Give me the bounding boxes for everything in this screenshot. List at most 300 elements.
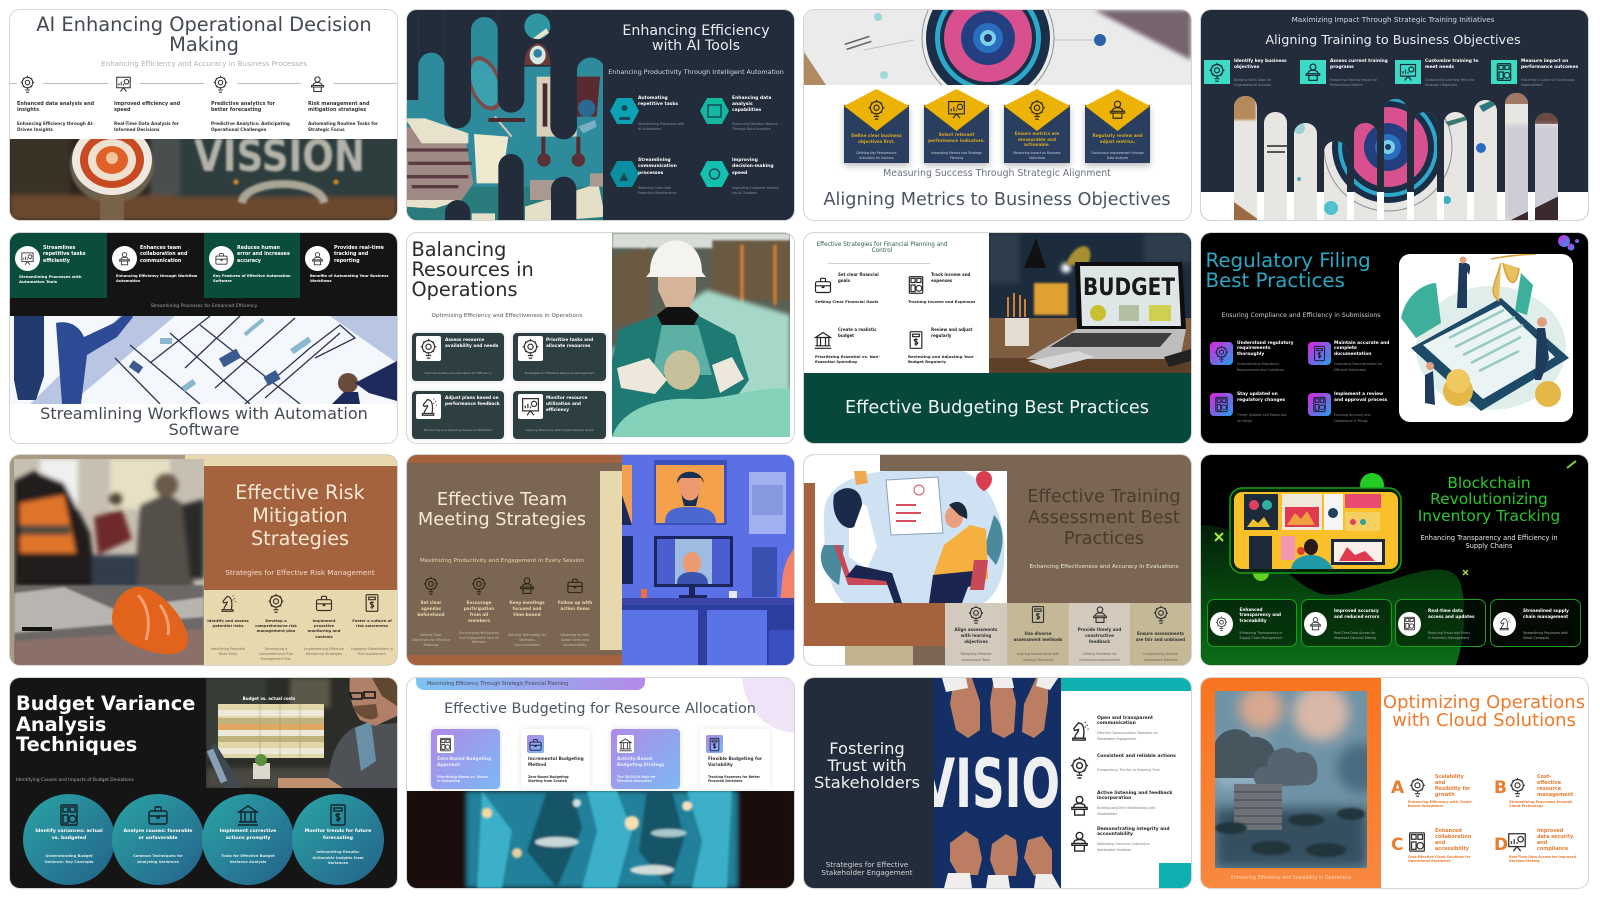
label — [124, 828, 192, 842]
icon: globe with cap — [1151, 605, 1171, 624]
subtitle — [1420, 534, 1558, 550]
icon: circuit brain — [20, 76, 34, 93]
icon: hexagon chess piece — [610, 161, 638, 187]
label: focused and — [513, 606, 541, 611]
note — [459, 631, 499, 644]
icon: team network — [310, 76, 324, 92]
icon: white circle chess — [1493, 612, 1516, 636]
note: on Filings — [1237, 419, 1252, 423]
label: compliance — [1537, 846, 1568, 852]
label: communication — [140, 259, 181, 264]
label: performance feedback — [445, 402, 500, 406]
label — [638, 158, 677, 176]
icon: book — [362, 593, 382, 613]
icon: gear head — [421, 576, 441, 595]
label: Real-time data — [1428, 608, 1463, 613]
note: Utilizing Technology for — [508, 632, 546, 636]
card: performance indicators — [924, 89, 989, 163]
icon: bank tile — [617, 734, 634, 752]
label — [140, 246, 187, 265]
icon: briefcase tile — [527, 734, 544, 752]
title: Best Practices — [1206, 268, 1345, 292]
icon: gold diamond with gear — [844, 89, 909, 131]
label: chain management — [1523, 614, 1568, 619]
label: Identify and assess — [207, 618, 249, 623]
top teal bar — [1061, 678, 1191, 690]
subtitle — [817, 242, 947, 254]
note: Streamlining Processes with — [1523, 630, 1568, 634]
note — [45, 852, 93, 865]
slide: Enhancing Efficiency with AI Tools — [407, 10, 794, 220]
label: Activity-Based — [617, 756, 652, 762]
title — [418, 490, 586, 531]
label — [838, 327, 877, 339]
label — [1015, 131, 1059, 148]
title: Techniques — [16, 733, 137, 756]
label: performance outcomes — [1521, 65, 1578, 70]
note — [1521, 78, 1574, 88]
left orange panel — [1201, 678, 1381, 888]
title: Operations — [412, 278, 518, 301]
icon: person tile — [1300, 60, 1326, 84]
label — [1537, 774, 1573, 798]
note — [1079, 651, 1120, 663]
label: Scalability — [1435, 774, 1464, 780]
card: key objectives — [1204, 60, 1298, 88]
title: Aligning Metrics to Business Objectives — [823, 190, 1171, 210]
card: constructive feedback — [1069, 603, 1130, 665]
letter: C — [1391, 834, 1403, 854]
label: and — [1435, 780, 1445, 786]
note — [437, 774, 488, 784]
label: Align assessments — [955, 627, 997, 632]
note: Management Plan — [261, 656, 291, 660]
icon: gear flower — [469, 576, 489, 595]
title: with Cloud Solutions — [1392, 710, 1576, 730]
icon: calculator tile — [1491, 60, 1517, 84]
note: Following Up with — [560, 632, 590, 636]
icon: gear — [266, 593, 286, 613]
note: Actionable Insights from — [312, 856, 364, 860]
oval: monitor trends — [292, 794, 384, 884]
title — [814, 740, 920, 790]
white block — [804, 646, 845, 665]
note: Variances — [328, 861, 348, 865]
label: monitoring and — [308, 628, 340, 633]
label — [851, 133, 902, 145]
note: Effective Allocation — [617, 779, 652, 783]
note — [1428, 630, 1470, 641]
corner circle — [742, 616, 852, 732]
label: performance indicators. — [928, 138, 985, 143]
note — [617, 774, 656, 784]
label: proactive — [314, 623, 334, 628]
note: Meetings — [423, 642, 438, 646]
note — [1408, 801, 1472, 809]
title: Effective Budgeting Best Practices — [845, 398, 1149, 418]
note: Informed Decisions — [114, 127, 159, 132]
photo: blurred workshop with orange bag — [14, 459, 204, 665]
label: accuracy — [237, 259, 261, 264]
card: transparency — [1206, 599, 1296, 647]
label — [708, 756, 762, 768]
icon: white circle network — [1398, 612, 1421, 636]
note: Tracking Expenses for Better — [708, 774, 760, 778]
header band — [10, 232, 397, 316]
title: Trust with — [827, 756, 907, 774]
title: Enhancing Efficiency — [622, 23, 770, 39]
icon: calculator tile — [437, 734, 454, 752]
tan block — [845, 646, 913, 665]
slide: Regulatory Filing Best Practices — [1201, 232, 1588, 442]
note: Based Operations — [1408, 804, 1443, 808]
note: Assessment Methods — [1144, 658, 1177, 662]
white left strip — [804, 471, 815, 483]
subtitle: Identifying Causes and Impacts of Budget Deviations — [16, 778, 134, 782]
illustration: dashboard tablet — [1226, 473, 1411, 585]
slide: Fostering Trust with Stakeholders — [804, 678, 1191, 888]
label — [1428, 608, 1474, 620]
note: Designing Effective — [961, 652, 991, 656]
label: Set clear financial — [838, 272, 879, 277]
label: Flexible Budgeting for — [708, 756, 762, 762]
icon: briefcase — [813, 274, 833, 294]
note: Smart Contracts — [1523, 636, 1549, 640]
icon: gradient tile calculator — [1308, 392, 1331, 416]
label: Identify key business — [1234, 59, 1287, 64]
note: Assessment Tools — [962, 658, 990, 662]
note — [528, 774, 569, 784]
label: goals — [838, 278, 850, 283]
note: Strategies for Effective Resource Management — [525, 371, 594, 375]
icon: business person — [1068, 794, 1091, 816]
label: Improved — [1537, 828, 1563, 834]
icon: gear bulb tile — [1204, 60, 1230, 84]
note: Automation — [116, 278, 140, 282]
note: Reducing Fraud and Errors — [1428, 630, 1470, 634]
label: data security — [1537, 834, 1573, 840]
subtitle: Strategies for Effective — [826, 860, 908, 868]
photo: robot with magnifier seen through pill cut-outs — [407, 10, 603, 220]
label: adjust metrics. — [1100, 139, 1135, 144]
label: Adjust plans based on — [445, 396, 499, 400]
note: Enhancing Efficiency through Workflow — [116, 274, 197, 278]
label: programs — [1330, 65, 1354, 70]
label: transparency and — [1240, 612, 1281, 617]
label — [464, 600, 494, 624]
label: Encourage — [467, 600, 491, 605]
card: assess resources — [412, 332, 504, 380]
note: Driven Insights — [17, 127, 53, 132]
note — [304, 646, 344, 656]
card C — [1385, 828, 1485, 866]
note: Effective Communication Strategies for — [1097, 731, 1158, 735]
label: allocate resources — [546, 344, 590, 348]
note: Organizational Success — [1234, 82, 1271, 86]
label — [211, 100, 276, 113]
title: Blockchain — [1447, 474, 1531, 492]
label: Budgeting Strategy — [617, 762, 665, 768]
icon: presentation tile — [518, 394, 543, 418]
note: Strategic Focus — [308, 127, 345, 132]
label: assessment methods — [1014, 637, 1062, 642]
label: vs. budgeted — [52, 836, 86, 841]
note: Performance Metrics — [1330, 82, 1363, 86]
label: actions promptly — [226, 836, 270, 841]
label: Approach — [437, 762, 460, 768]
note: Enhancing Efficiency with Cloud- — [1408, 800, 1472, 804]
label — [1097, 790, 1172, 802]
label — [445, 338, 498, 350]
note: Operational Challenges — [211, 127, 266, 132]
label — [509, 600, 545, 618]
icon: gear head tile — [416, 336, 441, 360]
label: Incremental Budgeting — [528, 756, 584, 762]
label: Zero-Based Budgeting — [437, 756, 491, 762]
label: Predictive analytics for — [211, 100, 275, 106]
card: monitor utilization — [513, 390, 606, 438]
note: Variance Analysis — [230, 860, 266, 864]
label: management — [1537, 792, 1573, 798]
note — [1240, 630, 1282, 641]
label — [1521, 59, 1578, 71]
label: Enhancing data — [732, 96, 771, 101]
label: Enhances team — [140, 246, 181, 250]
card: communication — [610, 158, 677, 194]
note: Cost-Effective Cloud Solutions for — [1408, 855, 1470, 859]
card D — [1485, 828, 1585, 866]
note: Continuous Improvement — [1079, 658, 1120, 662]
card: data analysis — [17, 76, 94, 132]
title — [235, 482, 365, 551]
note: Streamlining Processes with — [19, 274, 81, 278]
note — [560, 632, 590, 648]
icon: chess tile — [416, 394, 441, 418]
card: review budget — [906, 328, 994, 366]
label: Provides real-time — [334, 246, 384, 250]
subtitle: Optimizing Efficiency and Effectiveness in Operations — [432, 312, 582, 318]
note: Indicators for Success — [860, 156, 893, 160]
note: Utilizing Feedback for — [1082, 652, 1117, 656]
label: regulatory changes — [1237, 398, 1285, 403]
label — [1097, 826, 1170, 838]
note: Common Techniques for — [133, 854, 183, 858]
label: Enhanced — [1435, 828, 1462, 834]
note: Through Data Analytics — [732, 126, 771, 130]
label: Maintain accurate and — [1334, 340, 1389, 346]
label: Method — [528, 762, 546, 768]
label — [1435, 774, 1470, 798]
label: Stay updated on — [1237, 392, 1278, 396]
note: Communication — [514, 642, 540, 646]
label — [928, 132, 985, 144]
icon: presentation — [1506, 830, 1528, 852]
note: Stakeholders — [1097, 812, 1117, 816]
label: Measure impact on — [1521, 59, 1568, 64]
label — [17, 100, 94, 113]
label: Select relevant — [939, 132, 974, 137]
icon: calculator — [906, 274, 926, 294]
note: Accountability — [563, 642, 587, 646]
label: collaboration — [1435, 834, 1471, 840]
label: action items — [560, 606, 590, 611]
photo: businessman reviewing budget table — [206, 678, 397, 788]
label — [931, 272, 970, 284]
note — [308, 121, 378, 132]
subtitle: Enhancing Efficiency and Accuracy in Business Processes — [101, 59, 307, 68]
label: communication — [638, 164, 677, 169]
note — [1334, 413, 1371, 424]
note: Decision-Making — [1509, 859, 1540, 863]
title — [622, 23, 770, 54]
note: Incorporating Diverse — [1143, 652, 1178, 656]
note: Aligning Resources with Organizational Goals — [526, 428, 593, 432]
note: Operational Excellence — [1408, 859, 1451, 863]
card body — [1085, 105, 1150, 163]
timeline rule — [10, 83, 397, 84]
tan side panel — [600, 471, 622, 650]
label: Keep meetings — [509, 600, 545, 605]
note: Zero-Based Budgeting: — [528, 774, 569, 778]
label: Identify variances: actual — [35, 829, 103, 834]
oval: analyze causes — [112, 794, 204, 884]
card: flexible — [700, 728, 770, 788]
note: Improvement — [1521, 82, 1542, 86]
photo: laptop showing BUDGET on a desk — [989, 232, 1191, 372]
label: Active listening and feedback — [1097, 790, 1172, 796]
note: Requirements and Guidelines — [1237, 368, 1284, 372]
slide: Effective Risk Mitigation Strategies — [10, 455, 397, 665]
note: in Inventory Management — [1428, 636, 1469, 640]
note — [1013, 150, 1061, 160]
title: Revolutionizing — [1430, 490, 1548, 508]
note — [351, 646, 393, 656]
icon: circle person — [305, 246, 330, 270]
note: Supply Chain Management — [1240, 636, 1282, 640]
label: access and updates — [1428, 614, 1474, 619]
card: track income — [906, 272, 994, 308]
title: Practices — [1064, 528, 1144, 549]
card: tasks — [15, 246, 105, 288]
note — [961, 651, 991, 663]
icon: book with dollar — [906, 330, 926, 350]
card: participation — [455, 575, 503, 650]
label: Develop a — [265, 618, 287, 623]
note: The 50/30/20 Rule for — [617, 774, 656, 778]
note — [1330, 78, 1377, 88]
label — [638, 96, 678, 107]
label — [1425, 59, 1478, 71]
title: Inventory Tracking — [1418, 507, 1560, 525]
note: Real-Time Data Access for — [1334, 630, 1375, 634]
label: effective — [1537, 780, 1561, 786]
item: active listening — [1068, 790, 1188, 820]
label: Follow up with — [558, 600, 592, 605]
label — [732, 158, 774, 176]
note: via AI Chatbots — [732, 190, 757, 194]
label — [1097, 716, 1153, 727]
note: Developing a — [265, 646, 287, 650]
icon: hexagon data — [700, 98, 729, 124]
title — [1206, 250, 1371, 290]
label — [1334, 340, 1389, 357]
note: Identifying Potential — [211, 646, 245, 650]
title — [16, 694, 195, 756]
photo: target dial seen through vertical pills — [1234, 93, 1558, 220]
label: agendas — [421, 606, 441, 611]
taupe block — [913, 646, 945, 665]
icon: briefcase — [565, 576, 585, 595]
label: and reduced errors — [1334, 614, 1379, 619]
label: better forecasting — [211, 107, 261, 113]
title: Making — [169, 33, 239, 56]
band — [204, 590, 397, 665]
card: measurable metrics — [1004, 89, 1070, 163]
item: open communication — [1068, 716, 1188, 744]
subtitle: Supply Chains — [1466, 542, 1512, 550]
label: and approval process — [1334, 398, 1387, 403]
subtitle: Ensuring Compliance and Efficiency in Submissions — [1221, 312, 1381, 318]
note: and Engagement from All — [459, 636, 499, 640]
label: collaboration and — [140, 252, 187, 257]
card: fair assessments — [1130, 603, 1191, 665]
subtitle: Control — [872, 248, 892, 254]
note — [1097, 842, 1150, 853]
note: Monitoring Strategies — [306, 652, 342, 656]
corner teal square — [1159, 862, 1191, 888]
note: Reviewing and Adjusting Your — [908, 354, 974, 358]
title — [40, 406, 368, 438]
note: Improved Decision Making — [1334, 636, 1376, 640]
label — [931, 327, 972, 339]
label: are fair and unbiased — [1136, 637, 1185, 642]
label: expenses — [931, 278, 952, 283]
card: maintain documentation — [1308, 340, 1398, 376]
letter: D — [1494, 834, 1508, 854]
note — [1234, 78, 1271, 88]
left panel — [804, 678, 934, 888]
label: decision-making — [732, 164, 774, 169]
note: Seamless — [519, 638, 535, 642]
note: Strategic Objectives — [1425, 82, 1457, 86]
title: Effective Risk — [235, 481, 365, 504]
label — [308, 100, 370, 113]
label: tracking and — [334, 252, 368, 257]
note — [1237, 413, 1287, 424]
note — [1509, 801, 1572, 809]
title — [412, 240, 534, 300]
label: Cost- — [1537, 774, 1551, 780]
label — [1435, 828, 1471, 852]
note: Stakeholder Engagement — [1097, 736, 1136, 740]
label: Improved efficiency and — [114, 100, 180, 106]
title: Resources in — [412, 258, 534, 281]
card: efficiency — [114, 76, 180, 132]
label — [1330, 59, 1388, 71]
label: Streamlines — [43, 246, 75, 250]
card A — [1385, 774, 1485, 812]
note: Prioritizing Needs vs. Wants — [437, 774, 488, 778]
label: growth — [1435, 792, 1455, 798]
note: Transparency: The Key to Fostering Trust — [1097, 768, 1160, 772]
label — [35, 828, 103, 842]
label — [1237, 340, 1293, 357]
title: Analysis — [16, 712, 106, 736]
oval: identify variances — [23, 794, 115, 884]
slide: AI Enhancing Operational Decision Making — [10, 10, 397, 220]
label: Regularly review and — [1092, 133, 1143, 138]
note: Essential Spending — [815, 359, 857, 364]
